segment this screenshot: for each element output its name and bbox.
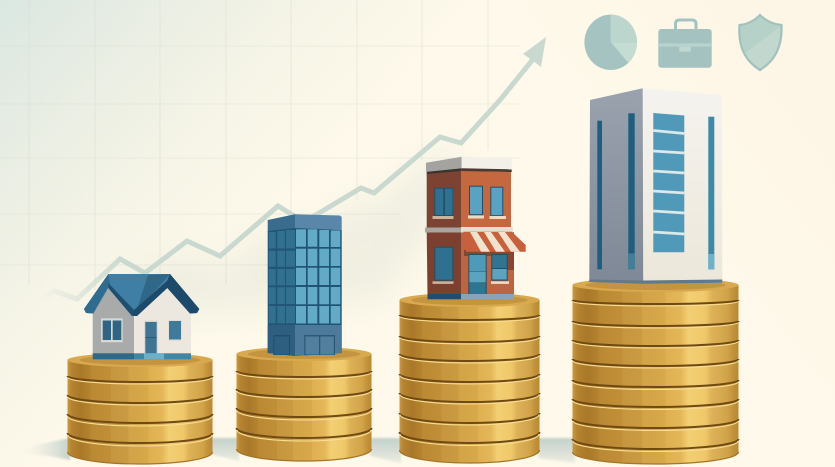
coin stack 1 bbox=[68, 353, 212, 464]
house bbox=[84, 274, 199, 359]
brick shop building bbox=[425, 157, 526, 299]
icon: pie chart bbox=[584, 15, 637, 70]
icon: shield bbox=[739, 15, 782, 70]
shop upper windows bbox=[432, 186, 506, 219]
shop floor band bbox=[425, 227, 513, 232]
rising trend arrow bbox=[39, 37, 546, 300]
shop awning bbox=[463, 232, 526, 252]
house door bbox=[144, 321, 158, 353]
glass tower bbox=[268, 214, 342, 356]
office central window bbox=[653, 113, 684, 252]
tower right windows bbox=[296, 229, 340, 324]
coin stack 3 bbox=[400, 293, 540, 463]
coin stack 4 bbox=[572, 278, 738, 464]
tower ground floor bbox=[268, 325, 342, 356]
shop lower window bbox=[432, 247, 454, 284]
soft glow under trend line bbox=[110, 150, 461, 320]
chart grid lines bbox=[0, 0, 520, 290]
office side slits bbox=[597, 113, 714, 269]
bottom ground shadows bbox=[14, 438, 575, 463]
office block bbox=[589, 88, 722, 284]
icon: briefcase bbox=[658, 20, 712, 68]
shop display window bbox=[491, 254, 509, 284]
tower left windows bbox=[269, 230, 295, 323]
house window right bbox=[168, 320, 182, 341]
coin stack 2 bbox=[236, 347, 372, 461]
house window left bbox=[101, 318, 123, 342]
shop door bbox=[468, 254, 487, 294]
